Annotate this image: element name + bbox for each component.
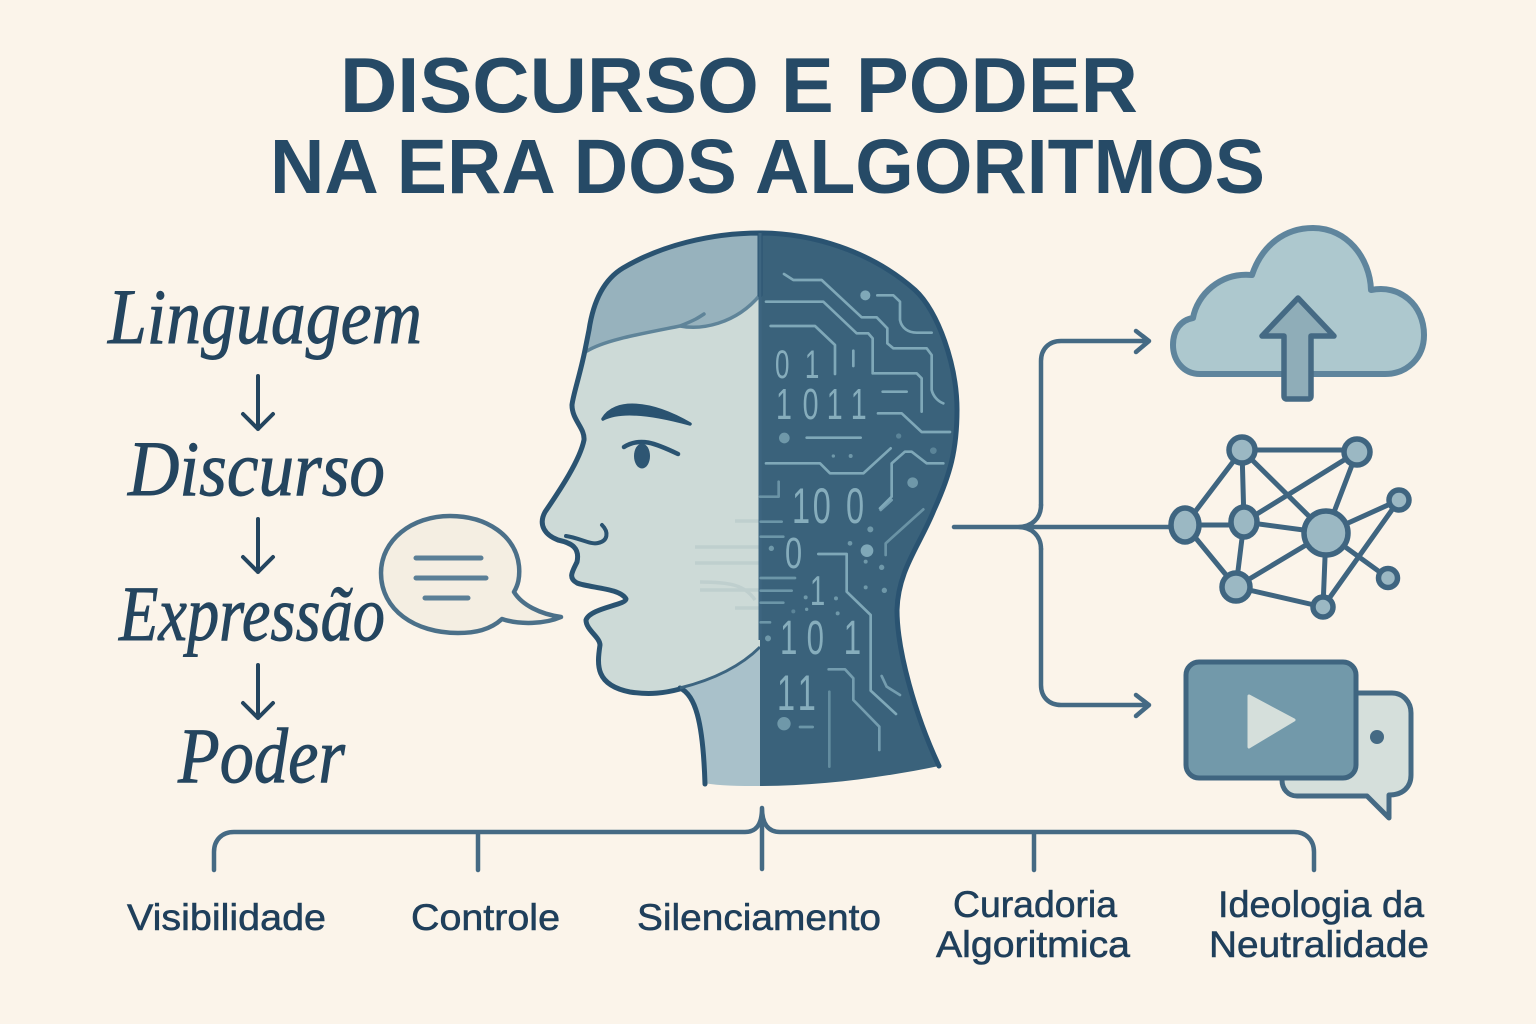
connector: to network (954, 505, 1172, 549)
neck: human side (680, 647, 760, 786)
binary digits (775, 342, 867, 721)
binary digits: 100 (792, 478, 864, 534)
head outline (542, 233, 957, 784)
label: Controle: Controle (411, 897, 560, 938)
title: NA ERA DOS ALGORITMOS (270, 124, 1265, 210)
icon: speech bubble (381, 516, 561, 633)
label: Ideologia da Neutralidade (1209, 884, 1429, 965)
eye (624, 442, 678, 468)
circuit traces upper (760, 274, 950, 508)
branching arrows to icons (954, 331, 1172, 716)
video panel (1186, 662, 1356, 778)
comment bubble (1282, 693, 1411, 818)
word: Expressao: Expressão (118, 570, 385, 657)
face: human side (542, 233, 760, 693)
arrow: to cloud (1041, 331, 1149, 505)
word: Poder: Poder (177, 712, 346, 799)
label: Ideologia da Neutralidade: Neutralidade (1209, 924, 1429, 965)
head illustration (542, 233, 957, 786)
arrow: expressao to poder (243, 665, 273, 718)
hemisphere: digital side (760, 233, 957, 786)
network nodes (1171, 437, 1409, 617)
icon: cloud upload (1173, 228, 1424, 399)
label: Visibilidade: Visibilidade (127, 897, 326, 938)
category labels (127, 884, 1429, 965)
center divider and jaw (680, 233, 760, 688)
title (270, 41, 1265, 210)
label: Ideologia da Neutralidade: Ideologia da (1218, 884, 1424, 925)
label: Curadoria Algoritmica (936, 884, 1130, 965)
binary digits: 11 (777, 665, 816, 721)
bottom bracket (214, 808, 1314, 870)
play triangle (1249, 696, 1294, 747)
label: Curadoria Algoritmica: Curadoria (953, 884, 1117, 925)
hair (587, 233, 760, 352)
network edges (1185, 450, 1399, 607)
eyebrow (603, 405, 690, 424)
binary digits: 1011 (776, 379, 867, 428)
icon: network (1171, 437, 1409, 617)
binary digits: 0 (785, 530, 802, 578)
binary digits: 1 (810, 567, 825, 614)
arrow: discurso to expressao (243, 519, 273, 572)
title: DISCURSO E PODER (340, 41, 1138, 129)
icon: video and comment (1186, 662, 1411, 818)
arrow: to video (1041, 549, 1149, 716)
comment dot (1370, 730, 1384, 744)
binary digits: 101 (780, 610, 861, 665)
label: Curadoria Algoritmica: Algoritmica (936, 924, 1130, 965)
label: Silenciamento: Silenciamento (637, 897, 881, 938)
word: Discurso: Discurso (127, 425, 385, 512)
binary digits: 01 (775, 342, 819, 387)
arrow: linguagem to discurso (243, 376, 273, 429)
nostril (566, 525, 607, 543)
hair edge (587, 295, 760, 351)
flow: linguagem to poder (107, 273, 422, 799)
face fading data lines (695, 521, 760, 608)
circuit traces lower (761, 500, 923, 767)
word: Linguagem: Linguagem (107, 273, 422, 360)
